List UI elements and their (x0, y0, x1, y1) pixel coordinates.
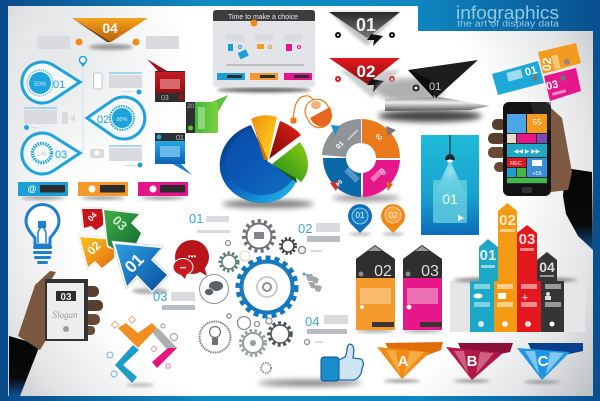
thumbs up (258, 344, 363, 386)
bar 03: 03 (519, 231, 535, 248)
smartphone (503, 102, 551, 196)
arrow 04 red: 04 (86, 210, 99, 223)
banner 04: 04 (102, 20, 118, 36)
banner 02: 02 (357, 62, 375, 81)
blue square note (155, 133, 192, 175)
bar 04: 04 (539, 259, 555, 275)
donut chart: 02 (374, 133, 383, 143)
speech bubbles: ••• (180, 266, 186, 272)
teardrop 01 (22, 62, 80, 103)
icon: speaker (62, 112, 75, 124)
text block 02 (24, 107, 57, 130)
timeline pin (80, 56, 86, 155)
black origami banner on platform: 01 (429, 81, 441, 93)
green square note: 20 (187, 104, 194, 110)
icon: camera (90, 149, 104, 158)
panel cyan (470, 281, 494, 332)
gear: teal (220, 253, 238, 271)
label 03: 03 (153, 289, 167, 304)
glass lamp box (421, 135, 479, 235)
teardrop 02: 02 (97, 114, 109, 126)
arrow 01 blue (112, 241, 169, 294)
circle: chat icon (200, 274, 228, 304)
speech bubbles (173, 240, 209, 279)
badge A (377, 342, 443, 382)
arrow 04 red (80, 207, 104, 233)
tablet (45, 279, 88, 341)
teardrop 03: 03 (55, 149, 67, 161)
speech bubbles: ••• (188, 252, 196, 261)
red square note (147, 59, 185, 102)
pin 01: 01 (356, 211, 365, 220)
smartphone: 55 (533, 118, 542, 127)
badge C: C (538, 353, 549, 370)
gears group (198, 219, 322, 374)
button pink (138, 182, 188, 200)
teardrop 03 (22, 133, 80, 174)
arrow 01 blue: 01 (121, 250, 148, 277)
smartphone: ◀◀ ▶ ▶▶ (514, 149, 541, 155)
panel dark (541, 281, 564, 332)
hand holding tablet (9, 271, 103, 396)
card orange 02: 02 (540, 57, 554, 71)
bar 02: 02 (499, 212, 516, 229)
card pink 03: 03 (545, 78, 560, 93)
gear: lower dark (269, 323, 291, 345)
badge A: A (398, 353, 409, 370)
colour cards (492, 43, 581, 101)
dots cluster (305, 274, 322, 292)
label 02 (298, 221, 340, 252)
badge B: B (467, 353, 478, 370)
button orange (78, 182, 128, 200)
header title: infographics (456, 2, 559, 23)
pin 01 (348, 204, 372, 236)
teardrop 01: 50% (34, 82, 47, 88)
card 03 (403, 245, 442, 332)
arrow 03 green (102, 208, 143, 250)
label 02: 02 (298, 221, 312, 236)
choice card: Time to make a choice (228, 12, 298, 21)
tablet: Slogan (52, 310, 78, 320)
gear: tiny ones (226, 240, 310, 373)
panel orange (494, 281, 517, 332)
label 03 (153, 289, 195, 310)
gear: lower grey (240, 330, 266, 356)
smartphone: REC (510, 161, 522, 167)
circle: bulb icon (200, 322, 230, 352)
button blue: @ (27, 184, 37, 194)
red square note: 03 (161, 95, 169, 102)
banner 01: 01 (356, 15, 376, 35)
banner 01 (329, 12, 400, 46)
text block 01 (109, 72, 142, 94)
hand holding smartphone (488, 108, 593, 250)
badge B (446, 343, 513, 382)
teardrop 03: 14k (37, 152, 48, 158)
lightbulb icon (26, 205, 59, 264)
label 01 (189, 211, 230, 233)
banner 02 (329, 58, 400, 98)
button blue (18, 182, 68, 200)
pin 02: 02 (389, 211, 398, 220)
tablet: 03 (60, 292, 72, 303)
card cyan 01: 01 (524, 64, 539, 79)
header title: the art of display data (457, 18, 560, 30)
big blue gear (236, 256, 298, 318)
card 02 (356, 245, 395, 332)
gear: small dark (280, 238, 296, 254)
arrow 03 green: 03 (109, 213, 130, 234)
label 04 (305, 314, 348, 343)
donut chart: 04 (333, 178, 343, 187)
badge C (517, 343, 583, 384)
donut chart (322, 119, 400, 201)
3D pie chart (220, 115, 314, 208)
gear: camera (244, 221, 274, 251)
big blue gear: EVOLUTION OF TECHNOLOGY IS THE KEY OF BUSINESS (240, 262, 294, 301)
icon: phone outline (94, 73, 102, 89)
donut chart: 03 (379, 166, 388, 176)
bar infographic (450, 203, 585, 332)
text block 03 (109, 145, 142, 168)
card 02: 02 (374, 263, 392, 280)
pin 02 (381, 204, 405, 236)
banner 04 (37, 18, 179, 50)
panel red: + (522, 292, 528, 304)
glass lamp box: 01 (442, 191, 458, 207)
teardrop 02: 80% (116, 117, 128, 123)
label 04: 04 (305, 314, 319, 329)
card 03: 03 (421, 263, 439, 280)
donut chart: 01 (335, 140, 346, 151)
arrow 02 orange (78, 235, 114, 270)
label 01: 01 (189, 211, 203, 226)
arrow 02 orange: 02 (84, 238, 104, 258)
blue square note: 01 (176, 135, 184, 142)
bar 01: 01 (480, 247, 496, 264)
black origami banner on platform (376, 60, 490, 122)
green square note (186, 95, 228, 133)
smartphone: +55 (532, 171, 542, 177)
mouse icon (291, 95, 336, 132)
pinwheel arrows (107, 316, 178, 386)
teardrop 01: 01 (53, 79, 65, 91)
teardrop 02 (87, 97, 145, 139)
choice card (213, 10, 315, 92)
